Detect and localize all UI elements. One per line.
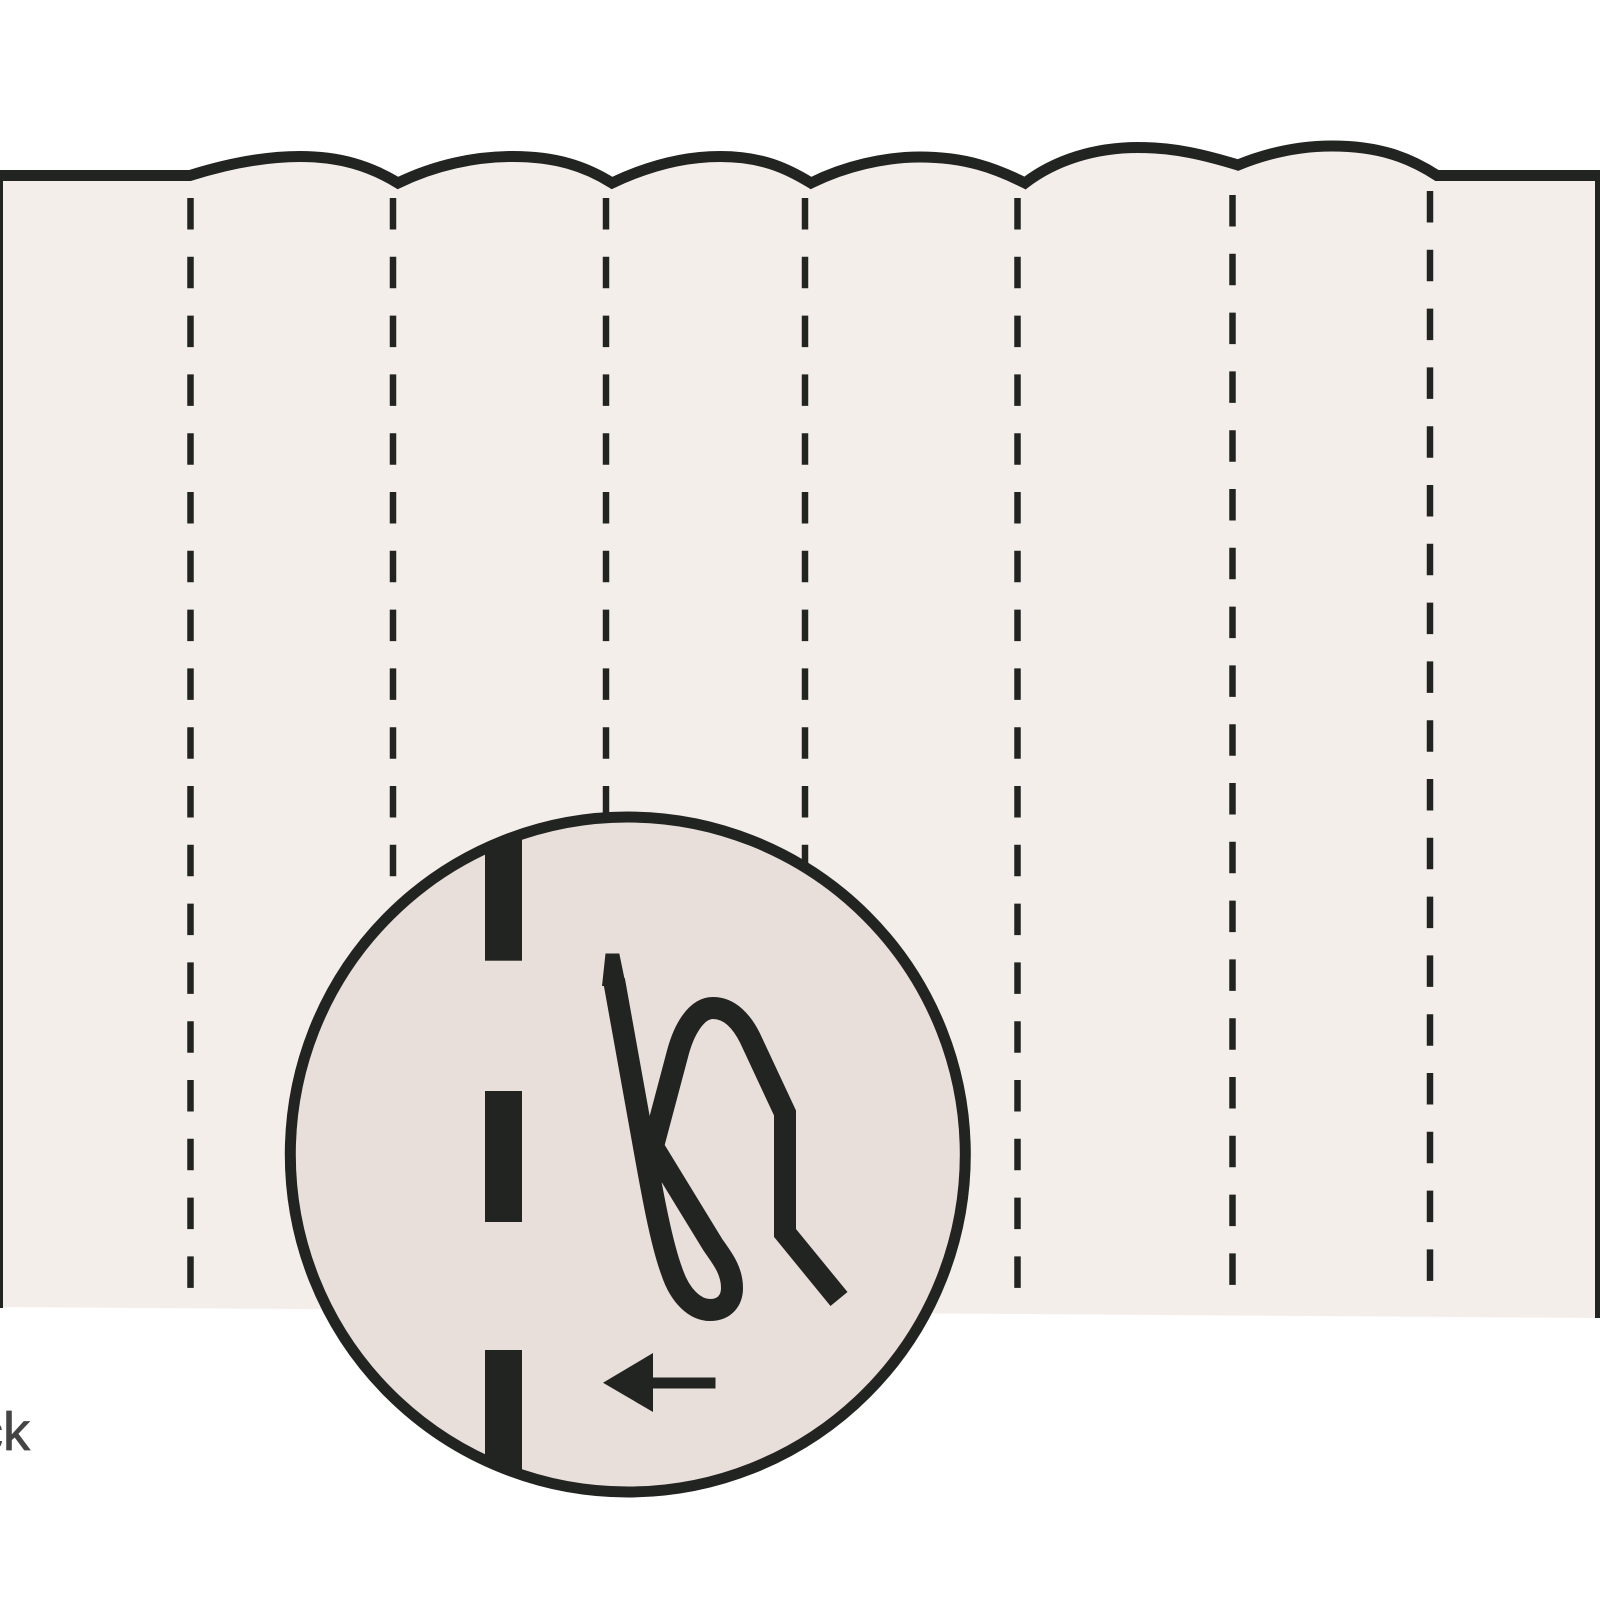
circle background <box>290 817 965 1492</box>
curtain fill <box>0 146 1600 1318</box>
panel: curtain fabric <box>0 146 1600 1318</box>
dashed hem line inside circle <box>485 840 522 1470</box>
curtain right edge <box>1595 175 1600 1318</box>
icon: curtain hook <box>602 954 839 1310</box>
curtain scalloped top edge <box>0 146 1600 183</box>
circle outline <box>290 817 965 1492</box>
curtain left edge <box>0 175 3 1308</box>
dashed pleat fold lines <box>190 191 1430 1288</box>
hook arm stroke <box>648 1008 839 1299</box>
hook loop stroke <box>614 980 732 1310</box>
hook tip <box>602 954 626 986</box>
arrow: pointing left <box>603 1353 716 1412</box>
callout: hook detail circle <box>290 800 965 1510</box>
